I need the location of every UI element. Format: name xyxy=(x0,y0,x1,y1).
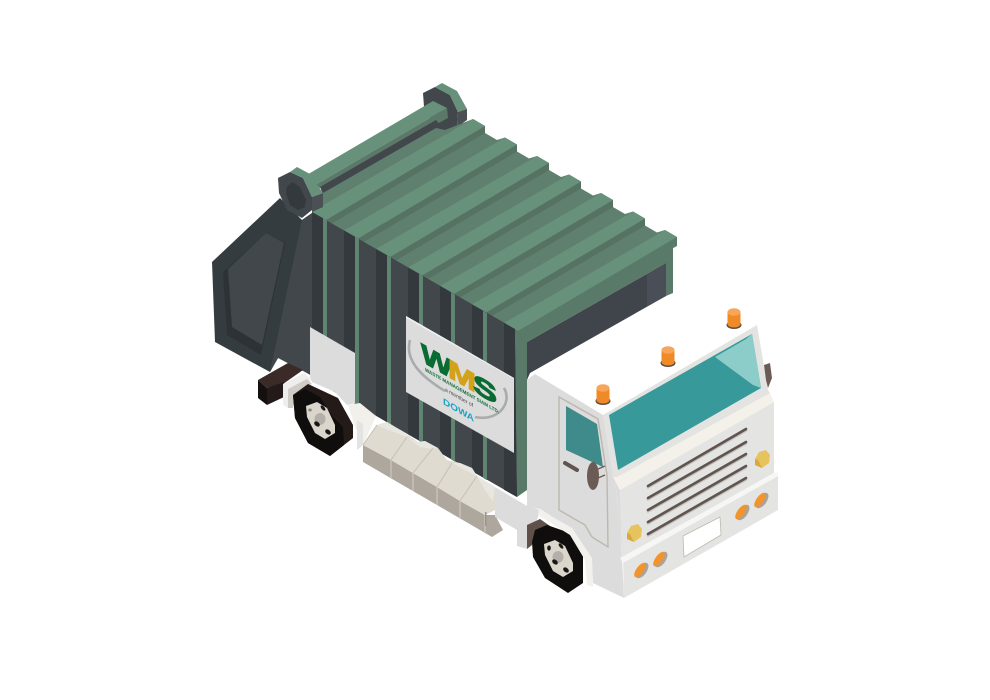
front bumper xyxy=(620,472,778,598)
WMS logo letters xyxy=(421,338,497,410)
garbage body roof xyxy=(312,119,677,335)
door outline xyxy=(559,397,608,547)
body side corrugated panels xyxy=(312,212,517,497)
door handle xyxy=(565,463,577,470)
rear fender xyxy=(283,373,312,408)
rear hopper xyxy=(212,167,323,376)
top hinge bar xyxy=(305,83,467,194)
cab roof xyxy=(535,298,757,415)
white company sign xyxy=(406,316,514,453)
cab front xyxy=(603,325,778,598)
left yellow marker xyxy=(627,524,642,542)
company name: WASTE MANAGEMENT SIAM LTD. xyxy=(425,367,499,416)
WMS logo letters: M xyxy=(448,353,476,398)
front fender xyxy=(538,509,593,587)
rear bumper xyxy=(258,363,303,405)
far hinge cap xyxy=(423,83,467,135)
beacon middle xyxy=(660,346,676,367)
beacon right xyxy=(726,308,742,329)
wheel arch xyxy=(527,519,550,549)
cream band xyxy=(613,393,774,490)
roof beacons xyxy=(596,308,742,405)
front wheel xyxy=(532,525,583,593)
rear hub xyxy=(306,402,335,439)
right mirror xyxy=(764,363,772,388)
WMS logo letters: W xyxy=(421,338,453,385)
side window xyxy=(566,406,603,467)
rear body connector xyxy=(348,403,376,450)
member line: a member of xyxy=(445,387,473,409)
beacon left xyxy=(596,384,610,405)
headlights xyxy=(632,491,771,580)
WMS logo letters: S xyxy=(473,368,497,410)
windshield frame xyxy=(603,325,770,477)
grille slots xyxy=(648,429,746,536)
side mirror xyxy=(587,462,605,490)
logo swoosh xyxy=(409,340,507,418)
windshield highlight xyxy=(715,334,761,388)
cab side xyxy=(527,374,624,598)
near hinge cap xyxy=(278,167,323,218)
side box xyxy=(363,422,503,537)
license plate xyxy=(683,517,721,557)
rear side panel xyxy=(310,327,355,405)
right yellow marker xyxy=(755,450,770,468)
front hub xyxy=(544,540,573,577)
DOWA wordmark: DOWA xyxy=(443,397,474,425)
grille face xyxy=(620,402,774,558)
windshield glass xyxy=(609,334,761,470)
rear wheel xyxy=(293,384,353,456)
side corner xyxy=(613,477,622,558)
chassis strip to cab xyxy=(495,487,540,549)
body front opening xyxy=(515,237,677,497)
